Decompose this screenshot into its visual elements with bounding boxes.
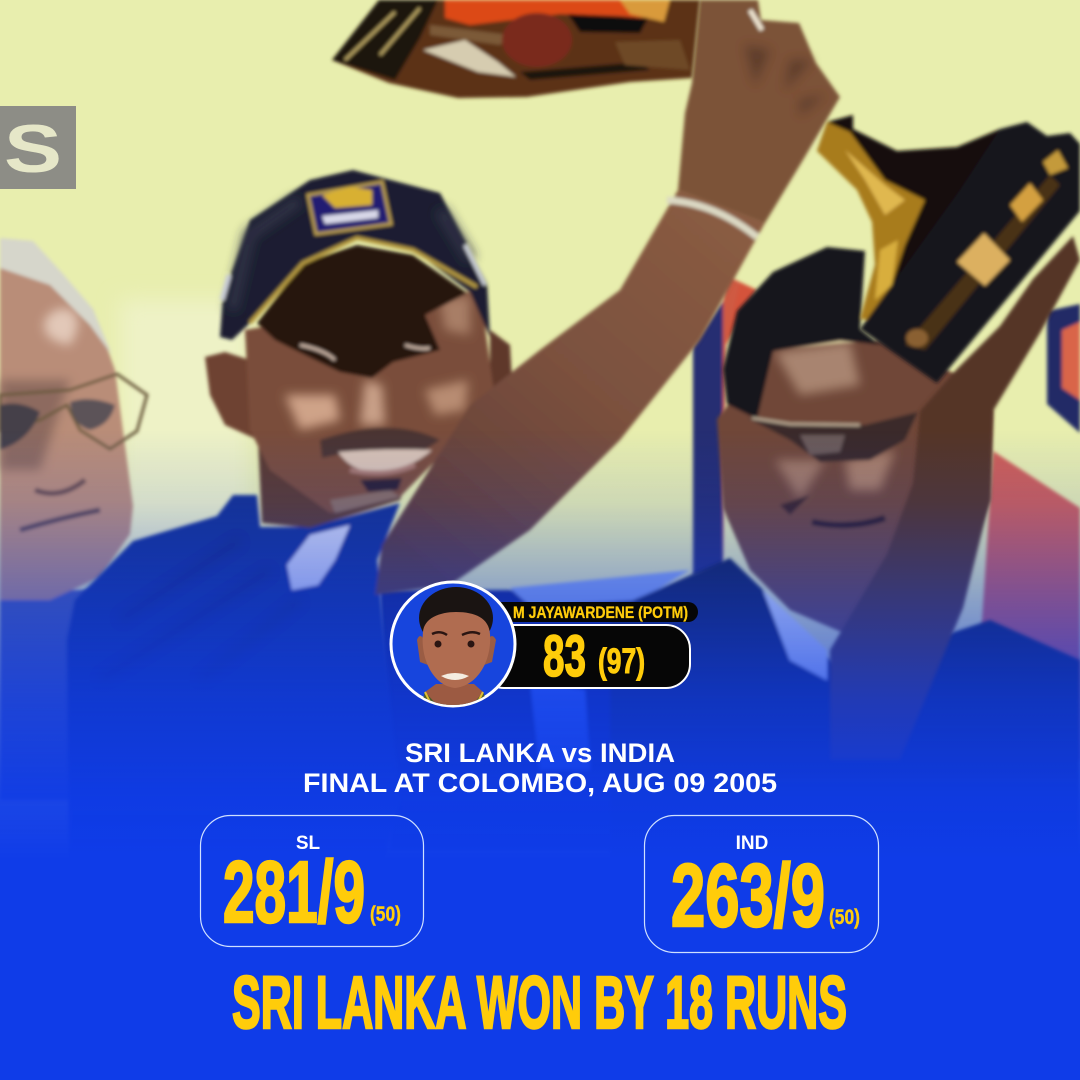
ears bbox=[205, 352, 258, 440]
trophy base bbox=[860, 122, 1080, 383]
match title: FINAL AT COLOMBO, AUG 09 2005 bbox=[303, 768, 777, 798]
right man face bbox=[717, 340, 993, 640]
cap peak edge bbox=[250, 238, 477, 323]
backdrop: red and navy graphic panels bbox=[693, 276, 1080, 760]
visor shadow and eyes bbox=[257, 245, 467, 378]
match title: SRI LANKA vs INDIA bbox=[405, 738, 675, 768]
score pill bbox=[480, 624, 690, 689]
score card: India: IND bbox=[736, 833, 768, 854]
sleeve logo bbox=[287, 525, 350, 590]
blue gradient overlay bbox=[0, 430, 1080, 1080]
trophy stem bbox=[817, 115, 1000, 320]
trophy holder hand and forearm bbox=[830, 236, 1080, 760]
shirt bbox=[67, 495, 400, 950]
left man hair bbox=[0, 238, 112, 355]
right man shirt collar bbox=[763, 590, 827, 680]
raised arm bbox=[375, 190, 765, 595]
right man glasses bbox=[748, 412, 918, 462]
backdrop sign: grey box bbox=[0, 106, 76, 189]
hand bbox=[678, 0, 840, 223]
photo: man on right in suit bbox=[380, 247, 1080, 1000]
cap badge bbox=[308, 182, 391, 234]
score pill: (97) bbox=[598, 642, 645, 681]
pale shirt patch bbox=[510, 570, 690, 606]
neck bbox=[258, 440, 420, 528]
score pill: 83 bbox=[543, 624, 586, 689]
player name pill: M JAYAWARDENE (POTM) bbox=[513, 604, 688, 622]
left man suit and neck bbox=[0, 590, 100, 800]
player portrait bbox=[391, 582, 515, 710]
right man suit bbox=[610, 558, 1080, 1000]
wristband bbox=[667, 200, 757, 237]
photo: main player with cap and blue shirt bbox=[67, 0, 840, 950]
match title bbox=[303, 738, 777, 798]
player of the match card bbox=[391, 582, 698, 710]
right man hair bbox=[723, 247, 880, 419]
left man glasses bbox=[0, 374, 147, 450]
score card: India: (50) bbox=[829, 906, 860, 929]
backdrop sign: grey box: S bbox=[4, 111, 62, 187]
photo: man on left with glasses bbox=[0, 238, 147, 800]
central dark clothing behind arm bbox=[380, 590, 640, 850]
score card: Sri Lanka bbox=[200, 816, 424, 946]
cap bbox=[220, 170, 490, 340]
face bbox=[245, 290, 495, 513]
moustache and mouth bbox=[320, 428, 440, 458]
light sleeve stripe bbox=[530, 680, 590, 770]
left man nose and mouth bbox=[35, 480, 85, 493]
left man face bbox=[0, 262, 133, 600]
score card: Sri Lanka: (50) bbox=[370, 903, 401, 926]
right man mouth bbox=[812, 518, 885, 525]
trophy bowl bbox=[332, 0, 700, 98]
score card: Sri Lanka: 281/9 bbox=[223, 844, 365, 941]
score card: Sri Lanka: SL bbox=[296, 833, 321, 854]
score card: India bbox=[644, 816, 878, 952]
score card: India: 263/9 bbox=[671, 845, 825, 945]
trophy bbox=[332, 0, 1080, 760]
